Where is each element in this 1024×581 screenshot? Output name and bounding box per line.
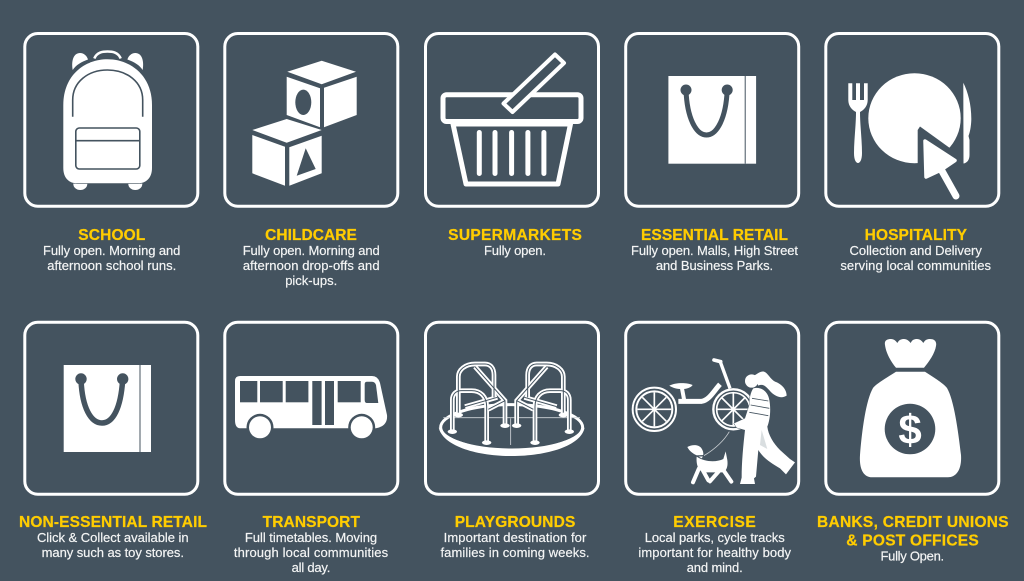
icon: shopping basket [443, 54, 581, 184]
text block: school: afternoon school runs. [47, 258, 176, 273]
text block: essential retail: Fully open. Malls, High Street [631, 243, 798, 258]
text block: exercise: important for healthy body [638, 545, 792, 560]
text block: transport: all day. [292, 560, 330, 575]
heading: playgrounds: PLAYGROUNDS [455, 514, 575, 531]
icon: plate, fork, knife and cursor [848, 73, 971, 196]
panel: essential retail [626, 34, 799, 273]
icon: playground roundabout [439, 364, 585, 456]
text block: exercise: and mind. [687, 560, 743, 575]
heading: supermarkets: SUPERMARKETS [448, 227, 582, 244]
text block: playgrounds: Important destination for [444, 530, 587, 545]
heading: banks, credit unions and post offices: BANKS, CREDIT UNIONS [817, 514, 1009, 531]
text block: childcare: afternoon drop-offs and [243, 258, 380, 273]
heading: hospitality: HOSPITALITY [865, 227, 968, 244]
icon: toy blocks [252, 61, 357, 186]
icon: shopping bag [668, 76, 756, 164]
panel: hospitality [826, 34, 999, 273]
icon: backpack [63, 52, 152, 190]
text block: childcare: Fully open. Morning and [243, 243, 380, 258]
panel: transport [225, 322, 398, 575]
heading: essential retail: ESSENTIAL RETAIL [641, 227, 788, 244]
heading: banks, credit unions and post offices [817, 514, 1009, 550]
text block: childcare [243, 243, 380, 288]
panel: exercise [626, 322, 799, 575]
text block: non-essential retail: Click & Collect available in [37, 530, 189, 545]
heading: school: SCHOOL [78, 227, 145, 244]
text block: banks: Fully Open. [880, 549, 944, 564]
panel: childcare [225, 34, 398, 288]
icon: woman with bicycle and dog [633, 360, 795, 484]
text block: transport: through local communities [234, 545, 389, 560]
icon: money bag [860, 339, 961, 477]
text block: exercise [638, 530, 792, 575]
text block: childcare: pick-ups. [285, 273, 337, 288]
text block: transport: Full timetables. Moving [245, 530, 377, 545]
heading: transport: TRANSPORT [263, 514, 360, 531]
heading: banks, credit unions and post offices: & POST OFFICES [846, 533, 979, 550]
text block: playgrounds: families in coming weeks. [440, 545, 590, 560]
panel: non-essential retail [19, 322, 207, 560]
text block: non-essential retail [37, 530, 189, 560]
text block: playgrounds [440, 530, 590, 560]
text block: school [43, 243, 180, 273]
panel: supermarkets [426, 34, 598, 258]
text block: hospitality [840, 243, 992, 273]
icon: shopping bag [64, 365, 151, 452]
text block: hospitality: Collection and Delivery [850, 243, 982, 258]
panel: banks, credit unions and post offices [817, 322, 1009, 564]
text block: essential retail: and Business Parks. [656, 258, 773, 273]
text block: essential retail [631, 243, 798, 273]
text block: exercise: Local parks, cycle tracks [645, 530, 785, 545]
text block: supermarkets: Fully open. [484, 243, 546, 258]
text block: non-essential retail: many such as toy stores. [42, 545, 184, 560]
heading: non-essential retail: NON-ESSENTIAL RETAIL [19, 514, 207, 531]
heading: childcare: CHILDCARE [265, 227, 357, 244]
text block: school: Fully open. Morning and [43, 243, 180, 258]
panel: playgrounds [426, 322, 598, 560]
text block: transport [234, 530, 389, 575]
icon: money bag: $ [898, 406, 922, 453]
icon: bus [235, 376, 387, 441]
panel: school [25, 34, 198, 273]
text block: hospitality: serving local communities [840, 258, 992, 273]
heading: exercise: EXERCISE [673, 514, 756, 531]
